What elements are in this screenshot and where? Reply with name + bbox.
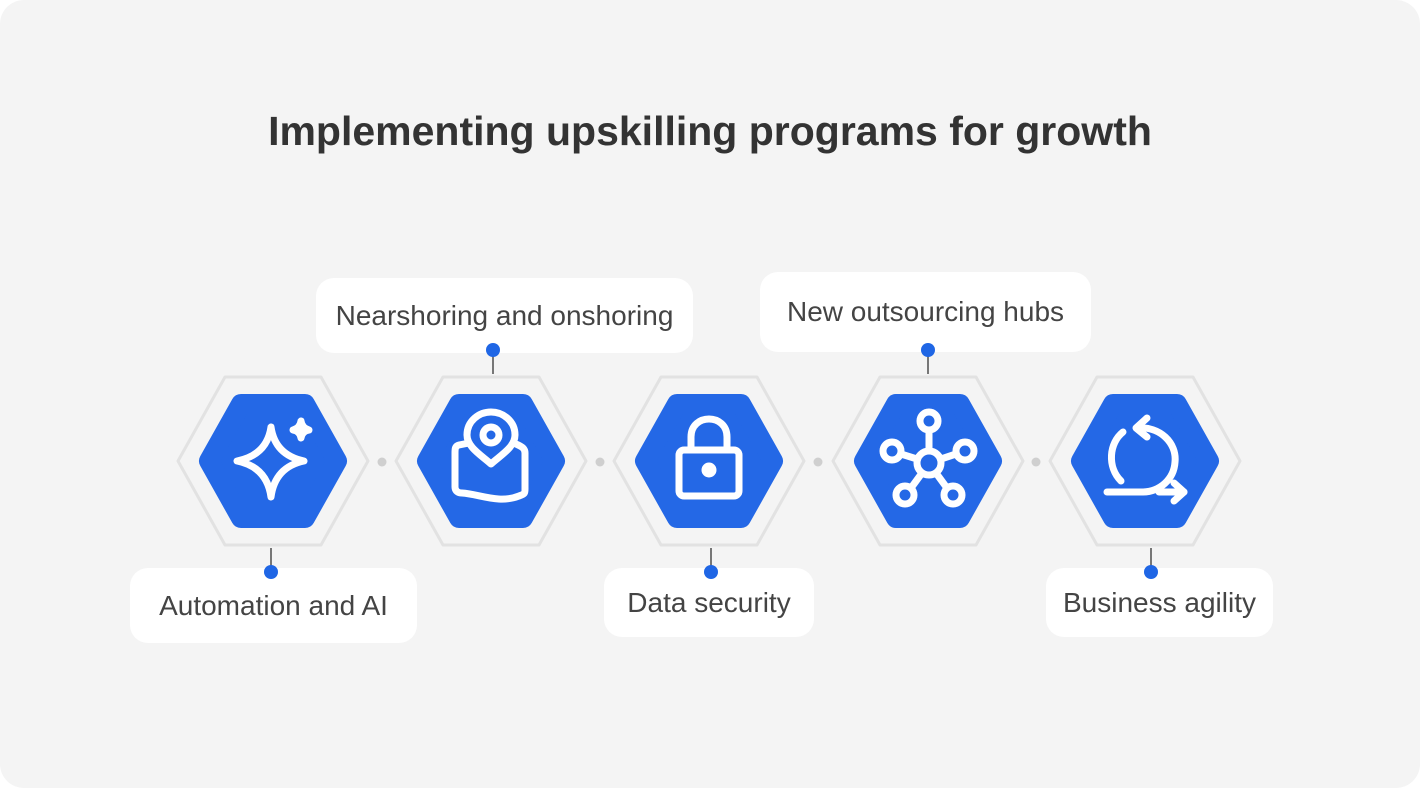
label: Business agility: Business agility [1063, 586, 1256, 618]
hex 3: lock [614, 377, 804, 545]
icon: sparkle [237, 421, 309, 497]
label: New outsourcing hubs [760, 272, 1091, 352]
gray dots between hexes [378, 458, 1040, 466]
icon: cycle arrow [1107, 418, 1184, 501]
label: Data security [604, 568, 814, 637]
icon: hub [883, 412, 974, 504]
hex 1: automation [178, 377, 368, 545]
icon: map pin [455, 412, 525, 499]
hex 5: agility [1050, 377, 1240, 545]
label: Automation and AI: Automation and AI [159, 590, 388, 620]
hex 2: map pin [396, 377, 586, 545]
connector lines [271, 350, 1151, 572]
icon: lock [679, 419, 739, 496]
label: Automation and AI [130, 568, 417, 643]
label: Nearshoring and onshoring: Nearshoring and onshoring [336, 300, 673, 330]
label: Business agility [1046, 568, 1273, 637]
label: Data security: Data security [627, 586, 791, 618]
label: New outsourcing hubs: New outsourcing hubs [787, 296, 1064, 327]
hex 4: network hub [833, 377, 1023, 545]
label: Nearshoring and onshoring [316, 278, 693, 353]
connector dots [264, 343, 1158, 579]
title: Implementing upskilling programs for growth [268, 108, 1152, 154]
